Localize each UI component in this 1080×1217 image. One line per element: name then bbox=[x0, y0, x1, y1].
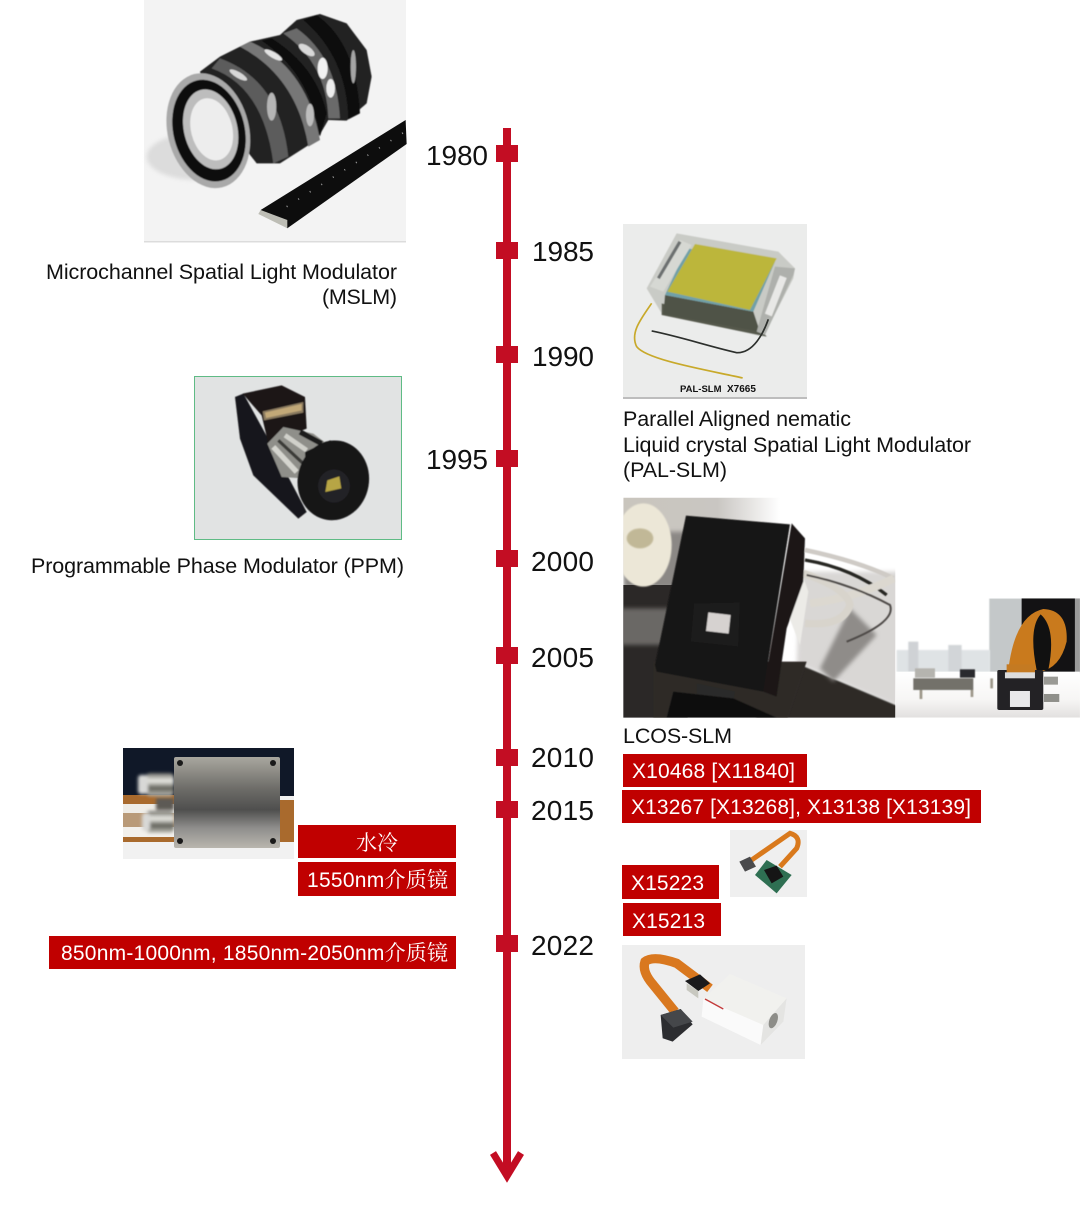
label: 850nm-1000nm, 1850nm-2050nm dielectric mirror bbox=[49, 936, 456, 969]
photo: water cooled SLM bbox=[123, 748, 294, 859]
year labels: 1980 bbox=[426, 140, 488, 171]
caption: PAL-SLM bbox=[623, 407, 971, 482]
timeline ticks bbox=[496, 145, 518, 952]
year labels: 1985 bbox=[532, 236, 594, 267]
label: 1550nm dielectric mirror bbox=[298, 862, 456, 896]
label: water cooling bbox=[298, 825, 456, 858]
label: X15223 bbox=[622, 865, 719, 899]
photo: LCOS-SLM flexible cable module bbox=[896, 598, 1080, 718]
year labels: 2022 bbox=[531, 930, 594, 961]
year labels: 1990 bbox=[532, 341, 594, 372]
photo: LCOS-SLM device bbox=[613, 498, 900, 728]
label: 850nm-1000nm, 1850nm-2050nm dielectric mirror: 850nm-1000nm, 1850nm-2050nm介质镜 bbox=[61, 942, 448, 965]
photo: PAL-SLM X7665: PAL-SLM bbox=[680, 384, 722, 395]
photo: X15223 driver board bbox=[730, 830, 807, 897]
label: 1550nm dielectric mirror: 1550nm介质镜 bbox=[307, 869, 448, 892]
photo: programmable phase modulator bbox=[194, 376, 402, 540]
label: X10468 [X11840]: X10468 [X11840] bbox=[632, 760, 795, 783]
label: X10468 [X11840] bbox=[623, 754, 807, 787]
label: X15213 bbox=[623, 903, 721, 936]
timeline axis with arrow bbox=[493, 128, 521, 1176]
photo: PAL-SLM X7665 bbox=[623, 224, 807, 399]
year labels: 2000 bbox=[531, 546, 594, 577]
caption: PPM: Programmable Phase Modulator (PPM) bbox=[31, 554, 404, 578]
caption: MSLM bbox=[46, 260, 397, 309]
label: X15223: X15223 bbox=[631, 872, 704, 895]
year labels: 2005 bbox=[531, 642, 594, 673]
year labels: 2010 bbox=[531, 742, 594, 773]
label: X15213: X15213 bbox=[632, 910, 705, 933]
year labels bbox=[426, 140, 594, 961]
caption: LCOS-SLM: LCOS-SLM bbox=[623, 724, 732, 748]
photo: X15213 SLM module and controller bbox=[622, 945, 805, 1059]
photo: microchannel spatial light modulator bbox=[144, 0, 407, 242]
year labels: 1995 bbox=[426, 444, 488, 475]
caption: PAL-SLM: (PAL-SLM) bbox=[623, 458, 727, 482]
caption: MSLM: (MSLM) bbox=[322, 285, 397, 309]
label: X13267 [X13268], X13138 [X13139]: X13267 [X13268], X13138 [X13139] bbox=[631, 796, 971, 819]
year labels: 2015 bbox=[531, 795, 594, 826]
caption: MSLM: Microchannel Spatial Light Modulator bbox=[46, 260, 397, 284]
photo: PAL-SLM X7665: X7665 bbox=[727, 384, 756, 395]
caption: PAL-SLM: Liquid crystal Spatial Light Modulator bbox=[623, 433, 971, 457]
label: X13267 [X13268], X13138 [X13139] bbox=[622, 790, 981, 823]
caption: PAL-SLM: Parallel Aligned nematic bbox=[623, 407, 851, 431]
label: water cooling: 水冷 bbox=[356, 832, 398, 855]
